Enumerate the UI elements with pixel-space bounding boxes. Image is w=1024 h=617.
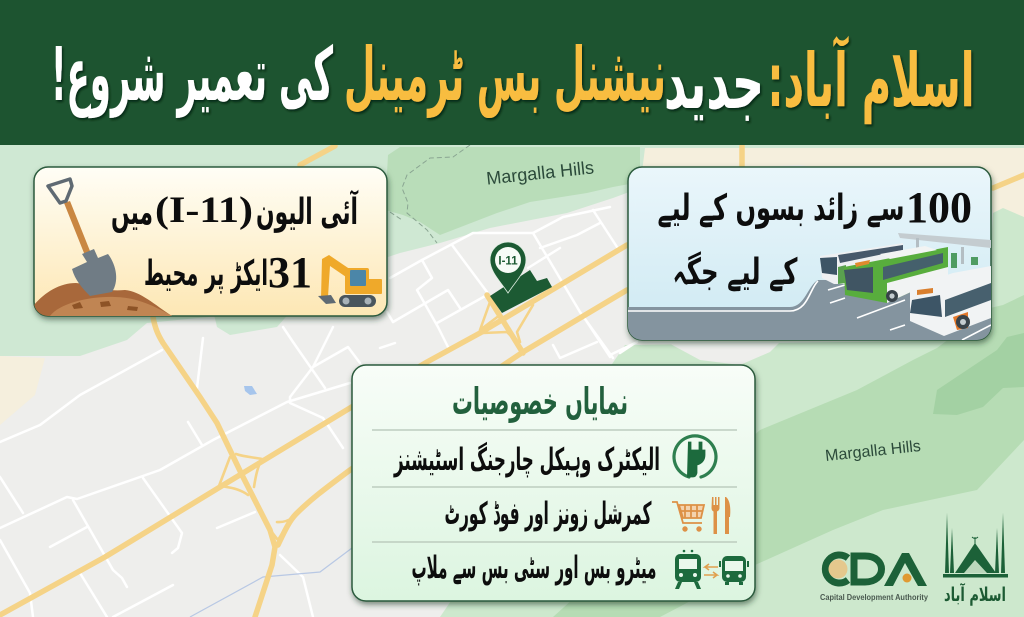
icon: city bus xyxy=(719,556,749,585)
map: ridge trail xyxy=(390,145,470,243)
icon: plug xyxy=(674,436,716,477)
logo: Capital Development Authority xyxy=(820,553,928,602)
panel: I-11 31 acres: ایکڑ پر محیط xyxy=(144,254,268,294)
map label: Margalla Hills south: Margalla Hills xyxy=(824,438,922,465)
feature: metro and city bus link: میٹرو بس اور سٹی بس سے ملاپ xyxy=(412,550,656,586)
panel: I-11 31 acres xyxy=(34,167,387,316)
green plot xyxy=(490,270,552,313)
panel: parking for 100+ buses xyxy=(628,167,991,340)
illustration: back white bus xyxy=(820,243,903,284)
site plot: I-11 xyxy=(490,242,552,313)
map: Margalla ridge xyxy=(385,147,640,235)
map: southeast hills light xyxy=(440,208,1024,617)
title: نیشنل بس ٹرمینل xyxy=(344,32,666,118)
logo: Islamabad Faisal Mosque xyxy=(943,513,1008,606)
icon: fork and knife xyxy=(712,497,730,534)
title: کی تعمیر شروع! xyxy=(51,32,333,119)
panel: key features xyxy=(352,365,755,601)
panel: I-11 31 acres: (I-11) xyxy=(155,190,253,231)
heading: نمایاں خصوصیات xyxy=(452,380,628,423)
map: green patch below first card xyxy=(213,310,292,335)
map: northern green hills xyxy=(0,145,1024,356)
illustration: green electric bus xyxy=(844,246,948,303)
feature: commercial zones and food court xyxy=(444,496,730,534)
text: line 2: کے لیے جگہ xyxy=(672,251,798,293)
map: southeast hills mid xyxy=(553,295,1024,617)
mosque emblem xyxy=(943,513,1008,578)
map: water line xyxy=(190,548,352,617)
icon: transfer arrows xyxy=(704,564,718,578)
icon: shovel xyxy=(48,179,116,296)
location pin: I-11 xyxy=(498,256,518,268)
text: line 1: آئی الیون xyxy=(256,189,359,233)
panel: I-11 31 acres: میں xyxy=(111,192,153,233)
feature: EV charging: الیکٹرک وہیکل چارجنگ اسٹیشنز xyxy=(393,442,660,478)
title xyxy=(51,32,974,126)
illustration: soil mound xyxy=(34,283,172,316)
map: yellow highways xyxy=(0,145,1024,617)
panel: parking for 100+ buses: سے زائد بسوں کے لیے xyxy=(658,188,904,229)
text: line 2: 31 xyxy=(268,248,312,297)
header band xyxy=(0,0,1024,145)
illustration: parking road xyxy=(628,280,991,340)
map: white roads xyxy=(0,207,637,617)
map label: Margalla Hills north: Margalla Hills xyxy=(485,157,595,189)
map: southeast hills dark xyxy=(933,333,1024,415)
text: line 1: 100 xyxy=(906,183,972,232)
map background xyxy=(0,145,1024,617)
feature: metro and city bus link xyxy=(412,550,749,589)
map: pond xyxy=(244,386,257,395)
title: جدید xyxy=(664,40,764,126)
logo caption: Capital Development Authority xyxy=(820,592,928,602)
map: beige patches xyxy=(0,147,1024,425)
feature: commercial zones and food court: کمرشل زونز اور فوڈ کورٹ xyxy=(444,496,652,532)
illustration: canopy and chargers xyxy=(898,233,991,268)
map: off-white patch below bus card xyxy=(663,340,782,365)
illustration: front orange bus xyxy=(910,266,991,336)
logo letters xyxy=(825,553,927,586)
icon: excavator xyxy=(318,255,382,307)
feature: EV charging xyxy=(393,436,716,478)
icon: shopping cart xyxy=(672,502,704,531)
icon: metro bus xyxy=(675,550,701,589)
